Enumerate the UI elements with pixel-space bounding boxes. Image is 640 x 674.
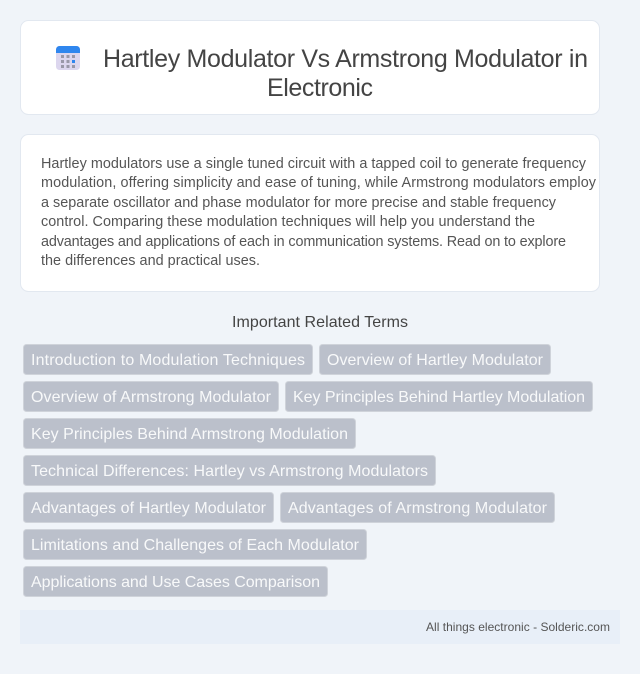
title (103, 45, 588, 102)
tag: overview armstrong (24, 382, 278, 412)
tag: advantages armstrong: Advantages of Armstrong Modulator (288, 500, 548, 517)
title: Hartley Modulator Vs Armstrong Modulator in (103, 45, 588, 73)
tag: introduction: Introduction to Modulation Techniques (31, 352, 305, 369)
tag: principles hartley (286, 382, 592, 412)
tag: principles armstrong (24, 418, 356, 448)
tag: limitations: Limitations and Challenges of Each Modulator (31, 537, 360, 554)
panel: introduction (20, 134, 600, 292)
icon: calendar (56, 46, 80, 70)
tag: technical differences (24, 456, 436, 486)
tag: principles armstrong: Key Principles Behind Armstrong Modulation (31, 426, 348, 443)
text block: introduction paragraph: Hartley modulators use a single tuned circuit with a tapped coil to generate frequency (41, 156, 587, 172)
tag: advantages armstrong (280, 492, 554, 522)
tag: introduction (24, 344, 312, 374)
text block: introduction paragraph (41, 156, 597, 269)
tag: applications (24, 566, 328, 596)
title: Electronic (267, 74, 373, 102)
tag: technical differences: Technical Differences: Hartley vs Armstrong Modulators (31, 463, 428, 480)
tag: overview hartley: Overview of Hartley Modulator (327, 352, 544, 369)
tag: applications: Applications and Use Cases Comparison (31, 574, 320, 591)
text block: introduction paragraph: the differences and practical uses. (41, 253, 260, 269)
footer: All things electronic - Solderic.com (426, 620, 610, 634)
footer (20, 610, 620, 644)
tag: advantages hartley: Advantages of Hartley Modulator (31, 500, 267, 517)
panel: title header (20, 20, 600, 114)
text block: introduction paragraph: control. Comparing these modulation techniques will help you understand the (41, 214, 535, 230)
tag: overview hartley (320, 344, 550, 374)
tag: advantages hartley (24, 492, 274, 522)
tag list (24, 344, 592, 596)
text block: introduction paragraph: a separate oscillator and phase modulator for more precise and stable frequency (41, 195, 557, 211)
tag: principles hartley: Key Principles Behind Hartley Modulation (293, 389, 585, 406)
text block: introduction paragraph: advantages and applications of each in communication systems. Read on to explore (41, 234, 566, 250)
heading: important related terms: Important Related Terms (232, 314, 408, 331)
text block: introduction paragraph: modulation, offering simplicity and ease of tuning, while Armstrong modulators employ (41, 175, 597, 191)
tag: limitations (24, 530, 366, 560)
tag: overview armstrong: Overview of Armstrong Modulator (31, 389, 272, 406)
